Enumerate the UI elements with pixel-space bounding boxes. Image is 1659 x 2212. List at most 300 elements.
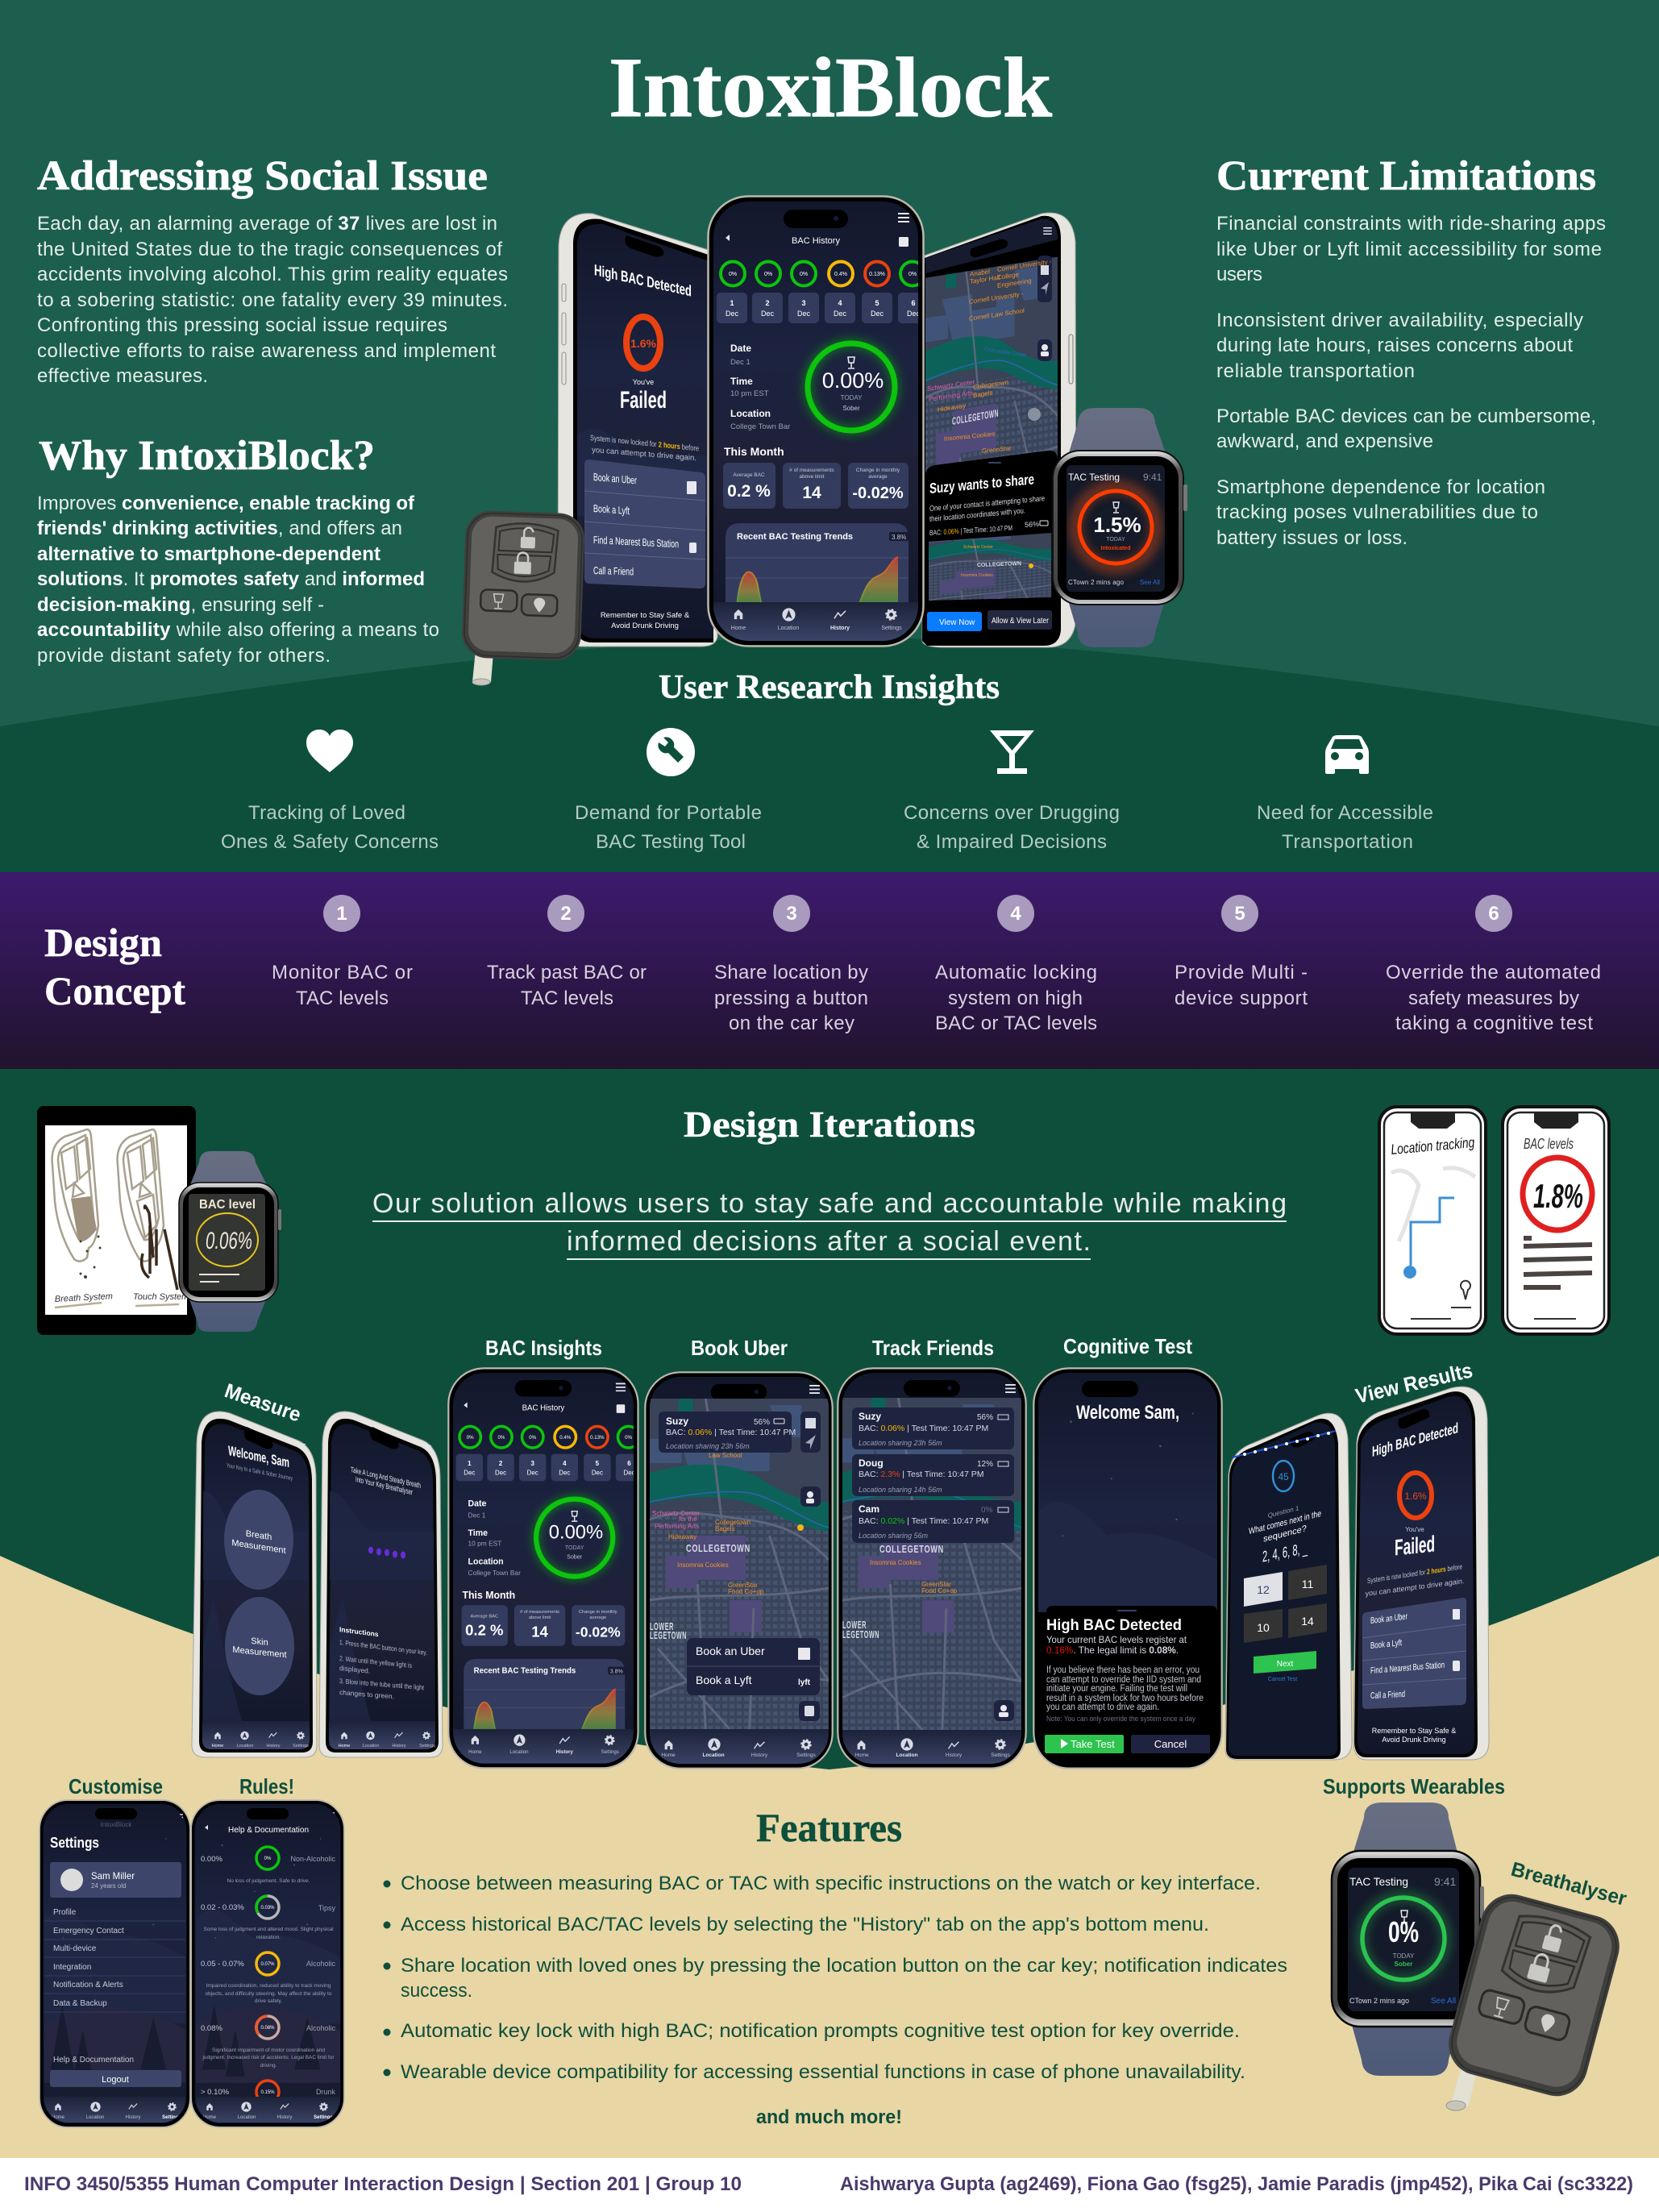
text block: social issue: accidents involving alcohol. This grim reality equates bbox=[37, 264, 508, 285]
step 5: Provide Multi - bbox=[1175, 962, 1308, 983]
heading: view results: View Results bbox=[1353, 1358, 1475, 1408]
phone: measure instructions: Take A Long And Steady Breath bbox=[351, 1466, 421, 1491]
heading: user research insights: User Research Insights bbox=[659, 669, 1000, 706]
phone: measure home: Measurement bbox=[232, 1645, 287, 1660]
smartwatch: sober reading: TODAY bbox=[1393, 1952, 1415, 1960]
phone: view results failed: Call a Friend bbox=[1370, 1690, 1405, 1701]
phone: hero BAC history: 0.13% bbox=[869, 272, 885, 277]
phone: settings: 24 years old bbox=[91, 1882, 127, 1890]
phone: hero BAC history: 4 bbox=[838, 299, 842, 307]
phone: BAC insights: College Town Bar bbox=[468, 1569, 521, 1577]
text block: social issue bbox=[37, 213, 508, 387]
phone: hero BAC history: Dec 1 bbox=[730, 358, 750, 367]
smartwatch: sober reading: CTown 2 mins ago bbox=[1349, 1997, 1409, 2005]
phone: help and documentation: Significant impairment of motor coordination and bbox=[212, 2048, 325, 2053]
text block: limitations: tracking poses vulnerabilities due to bbox=[1216, 501, 1538, 523]
feature list: Access historical BAC/TAC levels by selecting the "History" tab on the app's bottom menu. bbox=[401, 1914, 1209, 1936]
phone: measure instructions: 3. Blow into the tube until the light bbox=[339, 1677, 425, 1691]
smartwatch: hero: 1.5% bbox=[1093, 513, 1141, 537]
label: breathalyser: Breathalyser bbox=[1508, 1858, 1629, 1911]
text block: limitations bbox=[1216, 213, 1606, 549]
phone: measure home: Skin bbox=[251, 1636, 268, 1648]
step 2: TAC levels bbox=[521, 988, 613, 1009]
phone: track friends: COLLEGETOWN bbox=[879, 1543, 944, 1555]
text block: limitations: Portable BAC devices can be cumbersome, bbox=[1216, 405, 1596, 427]
phone: hero BAC history: Recent BAC Testing Trends bbox=[737, 532, 853, 542]
phone: help and documentation: 0.02 - 0.03% bbox=[201, 1903, 244, 1912]
phone: cognitive quiz: What comes next in the bbox=[1249, 1509, 1321, 1536]
phone: cognitive test: Cancel bbox=[1154, 1738, 1187, 1750]
smartwatch: hero bbox=[1053, 408, 1187, 647]
phone: cognitive test bbox=[1033, 1368, 1222, 1769]
phone: hero BAC history: Location bbox=[778, 626, 799, 631]
phone: hero location sharing: Anabel bbox=[970, 268, 990, 278]
phone: measure instructions: changes to green. bbox=[339, 1688, 394, 1700]
phone: book uber: History bbox=[751, 1753, 768, 1758]
text block: why intoxiblock: provide distant safety for others. bbox=[37, 645, 331, 667]
phone: view results failed: you can attempt to drive again. bbox=[1366, 1577, 1464, 1598]
text block: solution statement: informed decisions after a social event. bbox=[567, 1226, 1091, 1257]
phone: measure home: History bbox=[266, 1744, 281, 1748]
phone: view results failed: Avoid Drunk Driving bbox=[1382, 1736, 1446, 1744]
phone: hero BAC history: Dec bbox=[907, 310, 920, 318]
label: supports wearables: Supports Wearables bbox=[1323, 1774, 1505, 1798]
text block: social issue: to a sobering statistic: one fatality every 39 minutes. bbox=[37, 289, 508, 311]
phone: book uber: Location sharing 23h 56m bbox=[666, 1442, 750, 1450]
phone: hero BAC history: 3 bbox=[801, 299, 806, 307]
phone: book uber: Performing Arts bbox=[655, 1523, 699, 1530]
phone: cognitive quiz: 45 bbox=[1278, 1471, 1289, 1482]
icon: heart bbox=[306, 730, 353, 772]
phone: measure instructions bbox=[319, 1412, 443, 1757]
phone: hero location sharing: Allow & View Later bbox=[992, 617, 1050, 626]
phone: book uber: BAC: 0.06% | Test Time: 10:47 PM bbox=[666, 1428, 796, 1437]
phone: BAC insights: 0.4% bbox=[559, 1435, 572, 1441]
sketch: location tracking phone bbox=[1379, 1107, 1486, 1334]
phone: settings bbox=[40, 1800, 190, 2127]
text: insight 1: Ones & Safety Concerns bbox=[221, 831, 439, 853]
text block: limitations: awkward, and expensive bbox=[1216, 430, 1433, 452]
phone: track friends: LOWER bbox=[842, 1619, 867, 1631]
text block: limitations: Smartphone dependence for location bbox=[1216, 476, 1545, 498]
phone: cognitive quiz: sequence? bbox=[1263, 1524, 1307, 1545]
phone: hero BAC history: 0% bbox=[729, 272, 737, 277]
phone: help and documentation: Help & Documentation bbox=[228, 1826, 309, 1835]
sketch: smartwatch BAC level: 0.06% bbox=[206, 1228, 252, 1254]
step 5 bbox=[1175, 895, 1308, 1009]
phone: book uber: Food Co+op bbox=[728, 1588, 764, 1595]
step 1 bbox=[272, 895, 413, 1009]
phone: view results failed: High BAC Detected bbox=[1372, 1419, 1458, 1460]
feature list: Automatic key lock with high BAC; notification prompts cognitive test option for key override. bbox=[401, 2020, 1240, 2042]
phone: settings: Integration bbox=[53, 1963, 91, 1972]
phone: view results failed: Remember to Stay Safe & bbox=[1372, 1727, 1456, 1735]
phone: track friends: Home bbox=[854, 1753, 869, 1758]
phone: BAC insights: average bbox=[589, 1615, 606, 1620]
step 4: Automatic locking bbox=[935, 962, 1097, 983]
phone: help and documentation: 0.00% bbox=[201, 1855, 222, 1864]
heading: design concept: Design bbox=[44, 920, 162, 965]
phone: view results failed: System is now locked for 2 hours before bbox=[1367, 1562, 1462, 1585]
phone: help and documentation: 0.08% bbox=[260, 2026, 275, 2031]
phone: hero failed result: Remember to Stay Safe & bbox=[601, 611, 690, 620]
text block: why intoxiblock bbox=[37, 493, 439, 667]
phone: help and documentation: 0.08% bbox=[201, 2024, 222, 2033]
heading: why intoxiblock: Why IntoxiBlock? bbox=[39, 433, 375, 479]
sketch: BAC levels phone: 1.8% bbox=[1533, 1177, 1583, 1215]
phone: track friends bbox=[838, 1368, 1026, 1769]
phone: hero BAC history bbox=[708, 197, 929, 647]
phone: BAC insights: 0.2 % bbox=[465, 1621, 504, 1639]
phone: help and documentation: Impaired coordination, reduced ability to track moving bbox=[206, 1983, 331, 1989]
phone: settings: Profile bbox=[53, 1908, 77, 1917]
feature list: Choose between measuring BAC or TAC with specific instructions on the watch or key interface. bbox=[401, 1873, 1261, 1894]
phone: help and documentation: Settings bbox=[314, 2115, 333, 2120]
text block: solution statement: Our solution allows users to stay safe and accountable while making bbox=[372, 1188, 1287, 1219]
phone: BAC insights: Settings bbox=[601, 1749, 619, 1755]
step 6: taking a cognitive test bbox=[1395, 1012, 1593, 1034]
phone: hero location sharing: Cascadilla Creek bbox=[984, 347, 1027, 359]
phone: help and documentation: judgment. Increased risk of accidents. Legal BAC limit for bbox=[202, 2055, 335, 2060]
phone: hero location sharing: Insomnia Cookies bbox=[961, 573, 993, 578]
text: insight 4: Transportation bbox=[1282, 831, 1413, 853]
sketch: tablet with key concepts bbox=[37, 1106, 196, 1335]
phone: hero location sharing: Taylor Hall bbox=[970, 273, 1000, 285]
phone: BAC insights: Dec bbox=[527, 1469, 538, 1476]
phone: track friends: Cam bbox=[859, 1503, 879, 1515]
phone: track friends: 0% bbox=[981, 1506, 993, 1515]
phone: BAC insights: Home bbox=[468, 1749, 482, 1755]
phone: BAC insights: 4 bbox=[563, 1460, 567, 1467]
phone: cognitive quiz bbox=[1225, 1413, 1352, 1760]
step 3: on the car key bbox=[729, 1012, 854, 1034]
phone: hero BAC history: History bbox=[830, 626, 850, 631]
phone: book uber: Suzy bbox=[666, 1416, 688, 1427]
phone: book uber: for the bbox=[679, 1516, 697, 1523]
phone: BAC insights: Dec 1 bbox=[468, 1511, 486, 1520]
phone: hero BAC history: 0.2 % bbox=[727, 482, 771, 501]
phone: BAC insights bbox=[448, 1368, 642, 1768]
phone: view results failed: Failed bbox=[1395, 1532, 1435, 1560]
text block: limitations: users bbox=[1216, 264, 1262, 285]
phone: BAC insights: Sober bbox=[567, 1553, 583, 1560]
phone: book uber: LOWER bbox=[650, 1620, 674, 1632]
phone: hero location sharing: View Now bbox=[939, 618, 975, 627]
text: insight 3: & Impaired Decisions bbox=[917, 831, 1107, 853]
phone: hero location sharing: Cornell University - bbox=[969, 290, 1024, 306]
phone: help and documentation bbox=[191, 1800, 344, 2127]
phone: help and documentation: History bbox=[277, 2115, 292, 2120]
text: and much more: and much more! bbox=[756, 2106, 902, 2128]
phone: measure instructions: Settings bbox=[419, 1744, 435, 1748]
smartwatch: hero: Intoxicated bbox=[1101, 546, 1130, 551]
phone: BAC insights: Location bbox=[468, 1557, 504, 1566]
phone: BAC insights: 10 pm EST bbox=[468, 1539, 501, 1547]
phone: cognitive test: High BAC Detected bbox=[1046, 1617, 1182, 1634]
smartwatch: hero: TODAY bbox=[1106, 537, 1125, 543]
feature list: success. bbox=[401, 1980, 472, 2002]
phone: view results failed: Book an Uber bbox=[1370, 1611, 1407, 1626]
phone: hero BAC history: -0.02% bbox=[852, 484, 904, 502]
text block: social issue: Confronting this pressing social issue requires bbox=[37, 314, 447, 336]
phone: measure instructions: Into Your Key Breathalyser bbox=[356, 1475, 413, 1497]
phone: help and documentation: driving. bbox=[260, 2063, 277, 2069]
phone: BAC insights: 3 bbox=[531, 1460, 534, 1467]
text block: limitations: during late hours, raises concerns about bbox=[1216, 335, 1573, 356]
sketch: smartwatch BAC level bbox=[179, 1151, 281, 1332]
phone: cognitive quiz: 12 bbox=[1257, 1583, 1270, 1596]
phone: hero BAC history: 1 bbox=[730, 299, 734, 307]
phone: hero BAC history: above limit bbox=[799, 474, 825, 480]
phone: help and documentation: Tipsy bbox=[318, 1904, 335, 1912]
phone: settings: Home bbox=[52, 2115, 65, 2120]
phone: hero BAC history: Time bbox=[730, 376, 753, 387]
step 3: Share location by bbox=[714, 962, 868, 983]
panel: user research insights bbox=[221, 728, 1433, 853]
phone: measure home: Location bbox=[237, 1744, 253, 1748]
phone: hero BAC history: Dec bbox=[761, 310, 774, 318]
phone: hero location sharing: their location coordinates with you. bbox=[929, 506, 1025, 524]
step 2 bbox=[487, 895, 647, 1009]
phone: settings: History bbox=[126, 2115, 140, 2120]
text: insight 3 bbox=[904, 802, 1120, 853]
phone: measure instructions: Home bbox=[339, 1744, 350, 1748]
phone: measure home: Settings bbox=[293, 1744, 309, 1748]
phone: measure instructions: displayed. bbox=[339, 1664, 370, 1675]
phone: cognitive quiz: Next bbox=[1277, 1660, 1294, 1669]
text: insight 1 bbox=[221, 802, 439, 853]
phone: settings: IntoxiBlock bbox=[101, 1821, 132, 1828]
phone: hero BAC history: Change in monthly bbox=[856, 468, 900, 473]
step 1: 1 bbox=[336, 903, 347, 925]
phone: BAC insights: -0.02% bbox=[576, 1624, 621, 1640]
phone: hero BAC history: College Town Bar bbox=[730, 422, 790, 431]
phone: BAC insights: Date bbox=[468, 1499, 487, 1508]
phone: hero BAC history: 3.8% bbox=[892, 534, 906, 541]
phone: measure home: Welcome, Sam bbox=[228, 1442, 289, 1470]
text block: solution statement bbox=[372, 1188, 1287, 1260]
phone: cognitive test: Welcome Sam, bbox=[1076, 1402, 1179, 1424]
phone: hero location sharing: Cornell Law School bbox=[969, 307, 1025, 322]
step 5: device support bbox=[1175, 988, 1308, 1009]
phone: hero BAC history: Dec bbox=[871, 310, 884, 318]
text block: social issue: the United States due to the tragic consequences of bbox=[37, 239, 502, 260]
title: IntoxiBlock bbox=[609, 40, 1052, 135]
phone: hero BAC history: 0.4% bbox=[834, 272, 847, 277]
phone: hero location sharing: Engineering bbox=[997, 277, 1032, 289]
phone: settings: Emergency Contact bbox=[53, 1927, 124, 1936]
text block: why intoxiblock: Improves convenience, enable tracking of bbox=[37, 493, 415, 514]
phone: measure instructions: Location bbox=[363, 1744, 379, 1748]
phone: hero location sharing: Hideaway bbox=[938, 402, 966, 414]
phone: settings: Multi-device bbox=[53, 1944, 97, 1953]
phone: hero BAC history: BAC History bbox=[792, 236, 840, 246]
phone: BAC insights: 2 bbox=[499, 1460, 503, 1467]
step 4: 4 bbox=[1010, 903, 1021, 925]
phone: hero failed result: you can attempt to drive again. bbox=[592, 446, 696, 463]
phone: hero failed result: Book a Lyft bbox=[593, 502, 630, 517]
phone: book uber: Insomnia Cookies bbox=[677, 1561, 729, 1569]
phone: book uber: Settings bbox=[796, 1753, 816, 1758]
text: insight 1: Tracking of Loved bbox=[248, 802, 405, 824]
step 2: 2 bbox=[560, 903, 572, 925]
heading: measure: Measure bbox=[222, 1379, 304, 1427]
text block: limitations: Financial constraints with ride-sharing apps bbox=[1216, 213, 1606, 235]
step 1: TAC levels bbox=[296, 988, 389, 1009]
phone: BAC insights: 6 bbox=[627, 1460, 631, 1467]
text block: why intoxiblock: accountability while also offering a means to bbox=[37, 619, 439, 641]
phone: help and documentation: 0.07% bbox=[260, 1962, 275, 1967]
phone: hero location sharing: COLLEGETOWN bbox=[952, 407, 999, 427]
phone: help and documentation: Location bbox=[238, 2115, 256, 2120]
phone: track friends: Doug bbox=[859, 1457, 884, 1469]
phone: hero location sharing: College bbox=[997, 271, 1020, 281]
text: insight 4 bbox=[1257, 802, 1433, 853]
icon: car bbox=[1325, 735, 1369, 774]
footer bbox=[24, 2173, 1633, 2195]
phone: hero location sharing: BAC: 0.06% | Test Time: 10:47 PM bbox=[929, 524, 1012, 537]
panel: why intoxiblock bbox=[37, 433, 439, 667]
phone: measure home: Your Key to a Safe & Sober Journey bbox=[227, 1462, 293, 1482]
icon: wrench bbox=[647, 728, 695, 776]
label: track friends: Track Friends bbox=[872, 1336, 994, 1360]
phone: hero location sharing: One of your contact is attempting to share bbox=[929, 494, 1045, 514]
phone: BAC insights: # of measurements bbox=[520, 1610, 559, 1615]
phone: track friends: 56% bbox=[977, 1413, 993, 1422]
phone: hero BAC history: Location bbox=[730, 408, 771, 419]
phone: BAC insights: 0.13% bbox=[590, 1435, 605, 1441]
phone: hero location sharing: Cornell University - bbox=[997, 258, 1052, 273]
feature list bbox=[384, 1873, 1287, 2083]
phone: hero location sharing: Schwartz Center bbox=[963, 545, 993, 550]
phone: cognitive test: can attempt to override the IID system and bbox=[1046, 1675, 1201, 1685]
text block: why intoxiblock: alternative to smartphone-dependent bbox=[37, 543, 380, 565]
phone: hero failed result: You've bbox=[633, 378, 654, 386]
phone: hero BAC history: Settings bbox=[881, 626, 902, 631]
phone: book uber: 56% bbox=[754, 1418, 770, 1427]
phone: settings: Settings bbox=[162, 2115, 181, 2120]
phone: cognitive quiz: 10 bbox=[1257, 1621, 1270, 1634]
heading: addressing social issue: Addressing Social Issue bbox=[37, 153, 488, 199]
phone: BAC insights: 3.8% bbox=[610, 1669, 624, 1675]
phone: track friends: 12% bbox=[977, 1460, 993, 1469]
phone: BAC insights: 0% bbox=[497, 1435, 505, 1441]
label: BAC insights: BAC Insights bbox=[485, 1336, 602, 1360]
phone: hero BAC history: 0% bbox=[764, 272, 772, 277]
phone: book uber: Book a Lyft bbox=[696, 1674, 752, 1686]
key fob: hero bbox=[461, 509, 585, 685]
phone: hero BAC history: 14 bbox=[802, 484, 821, 502]
label: customise: Customise bbox=[69, 1774, 163, 1798]
text block: why intoxiblock: decision-making, ensuring self - bbox=[37, 594, 324, 616]
step 6: safety measures by bbox=[1408, 988, 1579, 1009]
phone: book uber: COLLEGETOWN bbox=[686, 1542, 750, 1554]
phone: hero location sharing bbox=[922, 211, 1076, 655]
phone: hero failed result: Book an Uber bbox=[593, 471, 637, 486]
phone: hero BAC history: 5 bbox=[875, 299, 879, 307]
phone: book uber: Home bbox=[661, 1753, 676, 1758]
phone: hero BAC history: Dec bbox=[797, 310, 810, 318]
phone: BAC insights: Change in monthly bbox=[579, 1610, 617, 1615]
phone: hero BAC history: Date bbox=[730, 343, 751, 354]
phone: track friends: Insomnia Cookies bbox=[870, 1559, 921, 1566]
feature list: Share location with loved ones by pressing the location button on the car key; notification indicates bbox=[401, 1955, 1287, 1977]
step 4: system on high bbox=[948, 988, 1083, 1009]
panel: current limitations bbox=[1216, 153, 1606, 549]
phone: book uber: Schwartz Center bbox=[652, 1510, 700, 1517]
phone: hero location sharing: Insomnia Cookies bbox=[944, 430, 995, 443]
phone: cognitive test: Take Test bbox=[1071, 1738, 1115, 1750]
phone: book uber: GreenStar bbox=[728, 1582, 758, 1589]
phone: help and documentation: Alcoholic bbox=[306, 2024, 335, 2032]
phone: BAC insights: This Month bbox=[463, 1590, 515, 1601]
phone: hero BAC history: Home bbox=[731, 626, 746, 631]
phone: hero BAC history: Dec bbox=[834, 310, 846, 318]
phone: BAC insights: Dec bbox=[592, 1469, 603, 1476]
phone: hero location sharing: Performing Arts bbox=[929, 389, 973, 403]
phone: settings: Location bbox=[86, 2115, 104, 2120]
step 4 bbox=[935, 895, 1097, 1034]
phone: hero BAC history: 2 bbox=[765, 299, 770, 307]
phone: help and documentation: Drunk bbox=[316, 2088, 335, 2096]
phone: measure home: Home bbox=[212, 1744, 223, 1748]
phone: BAC insights: Dec bbox=[495, 1469, 506, 1476]
smartwatch: sober reading: 9:41 bbox=[1434, 1875, 1456, 1888]
phone: hero failed result: Failed bbox=[620, 387, 667, 414]
text block: social issue: Each day, an alarming average of 37 lives are lost in bbox=[37, 213, 497, 235]
phone: book uber: Collegetown bbox=[715, 1519, 750, 1526]
phone: BAC insights: above limit bbox=[529, 1615, 551, 1620]
step 2: Track past BAC or bbox=[487, 962, 647, 983]
step 6: 6 bbox=[1488, 903, 1499, 925]
phone: settings: Settings bbox=[50, 1835, 99, 1851]
phone: hero location sharing: Suzy wants to share bbox=[929, 471, 1034, 497]
phone: cognitive quiz: 14 bbox=[1301, 1615, 1314, 1628]
text block: why intoxiblock: friends' drinking activities, and offers an bbox=[37, 518, 402, 539]
heading: design concept bbox=[44, 920, 185, 1013]
sketch: smartwatch BAC level: BAC level bbox=[199, 1198, 256, 1212]
phone: BAC insights: Average BAC bbox=[471, 1614, 498, 1619]
phone: measure instructions: 1. Press the BAC button on your key. bbox=[339, 1638, 427, 1657]
label: book uber: Book Uber bbox=[691, 1336, 788, 1360]
phone: track friends: Settings bbox=[991, 1753, 1010, 1758]
heading: design iterations: Design Iterations bbox=[684, 1104, 975, 1145]
phone: cognitive quiz: Cancel Test bbox=[1268, 1677, 1297, 1682]
step 6: Override the automated bbox=[1386, 962, 1601, 983]
phone: book uber: Hideaway bbox=[668, 1533, 696, 1540]
phone: hero BAC history: Sober bbox=[842, 405, 860, 412]
smartwatch: sober reading: TAC Testing bbox=[1349, 1875, 1408, 1888]
heading: current limitations: Current Limitations bbox=[1216, 153, 1596, 199]
phone: hero failed result bbox=[558, 214, 717, 647]
phone: hero failed result: Find a Nearest Bus Station bbox=[593, 534, 679, 550]
smartwatch: hero: TAC Testing bbox=[1068, 472, 1120, 483]
phone: cognitive test: If you believe there has been an error, you bbox=[1046, 1665, 1200, 1675]
phone: cognitive test: you can attempt to drive again. bbox=[1046, 1703, 1159, 1712]
phone: hero BAC history: average bbox=[868, 474, 888, 480]
phone: track friends: Location bbox=[896, 1753, 918, 1758]
phone: hero location sharing: COLLEGETOWN bbox=[977, 561, 1021, 568]
phone: book uber: Bagels bbox=[715, 1525, 734, 1532]
icon: martini bbox=[990, 730, 1034, 774]
text block: social issue: collective efforts to raise awareness and implement bbox=[37, 340, 496, 362]
phone: hero failed result: System is now locked for 2 hours before bbox=[590, 434, 699, 453]
phone: cognitive quiz: Question 1 bbox=[1268, 1504, 1299, 1520]
phone: track friends: GreenStar bbox=[921, 1581, 951, 1588]
text block: limitations: Inconsistent driver availability, especially bbox=[1216, 310, 1583, 331]
phone: hero location sharing: Bagels bbox=[973, 389, 992, 399]
step 6 bbox=[1386, 895, 1601, 1034]
